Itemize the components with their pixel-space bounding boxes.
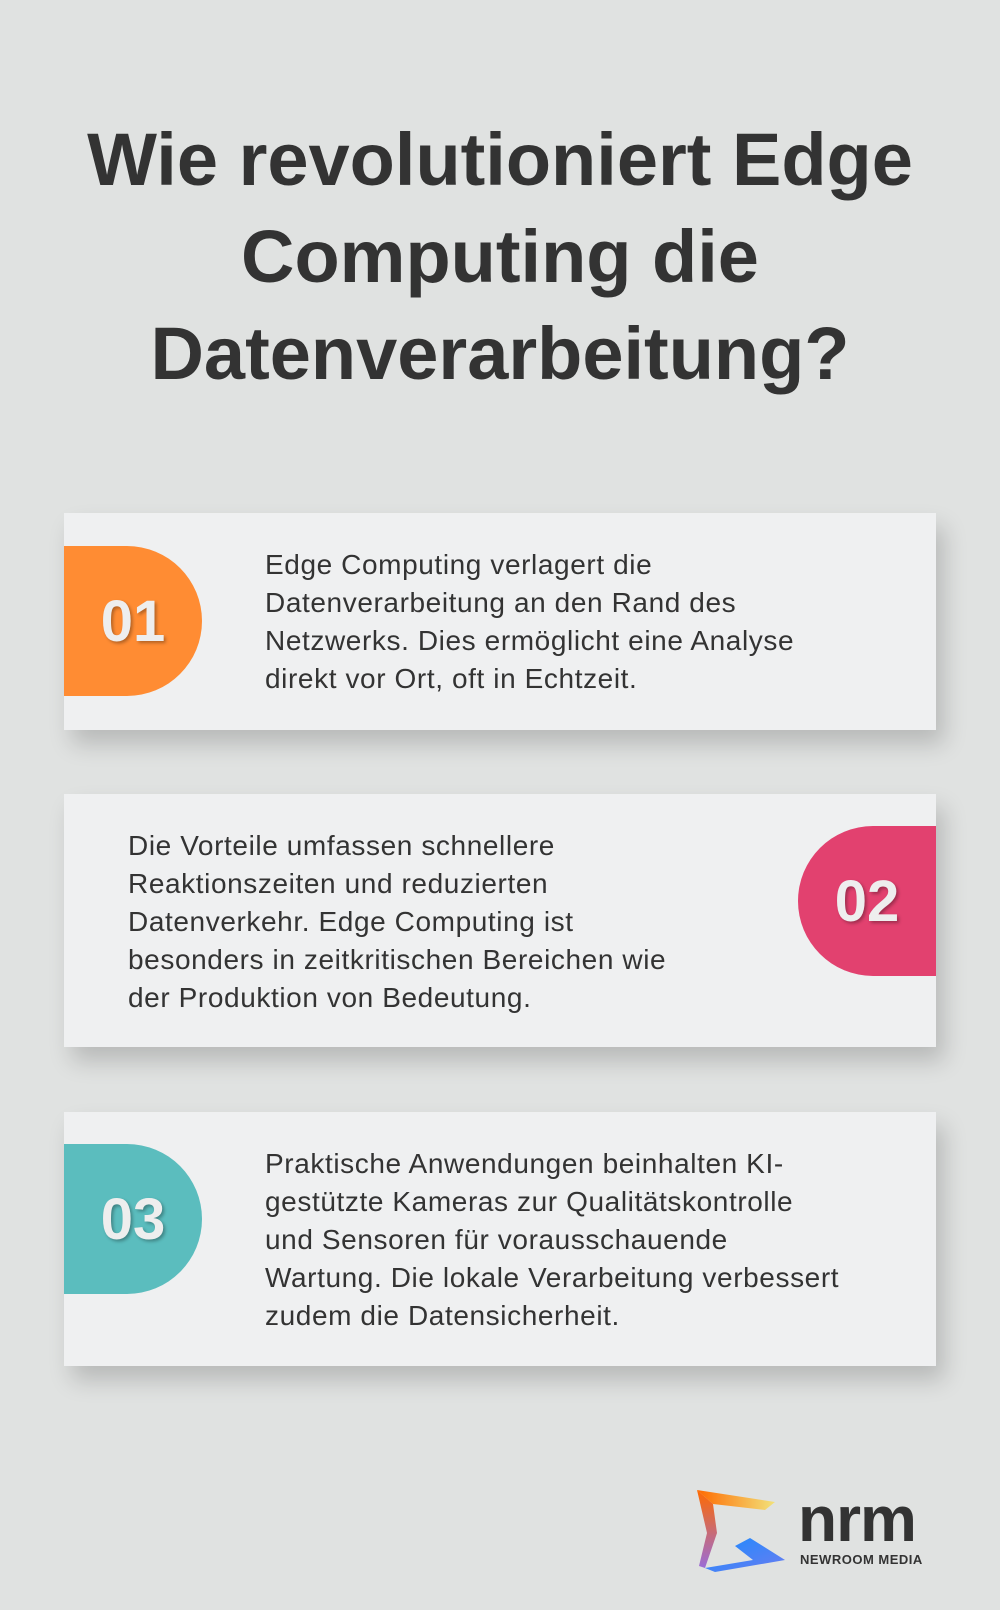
- panel: card 1: [64, 513, 936, 730]
- badge 03: [64, 1144, 202, 1294]
- text 1: Datenverarbeitung an den Rand des: [265, 587, 736, 618]
- badge 03: 03: [101, 1186, 165, 1252]
- text 3: Wartung. Die lokale Verarbeitung verbessert: [265, 1262, 839, 1293]
- badge 01: [64, 546, 202, 696]
- logo text: nrm: [798, 1483, 916, 1555]
- title: [87, 118, 913, 395]
- text 3: und Sensoren für vorausschauende: [265, 1224, 728, 1255]
- logo: NEWROOM MEDIA: [800, 1552, 923, 1567]
- title: Datenverarbeitung?: [150, 312, 850, 395]
- text 1: [265, 549, 794, 694]
- title: Wie revolutioniert Edge: [87, 118, 913, 201]
- text 2: [128, 830, 666, 1013]
- text 2: Datenverkehr. Edge Computing ist: [128, 906, 574, 937]
- text 2: besonders in zeitkritischen Bereichen wie: [128, 944, 666, 975]
- text 3: zudem die Datensicherheit.: [265, 1300, 620, 1331]
- text 2: Reaktionszeiten und reduzierten: [128, 868, 548, 899]
- panel: card 2: [64, 794, 936, 1047]
- text 1: Edge Computing verlagert die: [265, 549, 652, 580]
- text 3: gestützte Kameras zur Qualitätskontrolle: [265, 1186, 793, 1217]
- badge 01: 01: [101, 588, 165, 654]
- panel: card 3: [64, 1112, 936, 1366]
- text 3: Praktische Anwendungen beinhalten KI-: [265, 1148, 784, 1179]
- text 2: der Produktion von Bedeutung.: [128, 982, 531, 1013]
- text 1: Netzwerks. Dies ermöglicht eine Analyse: [265, 625, 794, 656]
- icon: logo mark: [697, 1490, 785, 1572]
- text 2: Die Vorteile umfassen schnellere: [128, 830, 555, 861]
- logo: [697, 1483, 923, 1572]
- title: Computing die: [241, 215, 759, 298]
- text 3: [265, 1148, 839, 1331]
- text 1: direkt vor Ort, oft in Echtzeit.: [265, 663, 637, 694]
- badge 02: [798, 826, 936, 976]
- badge 02: 02: [835, 868, 899, 934]
